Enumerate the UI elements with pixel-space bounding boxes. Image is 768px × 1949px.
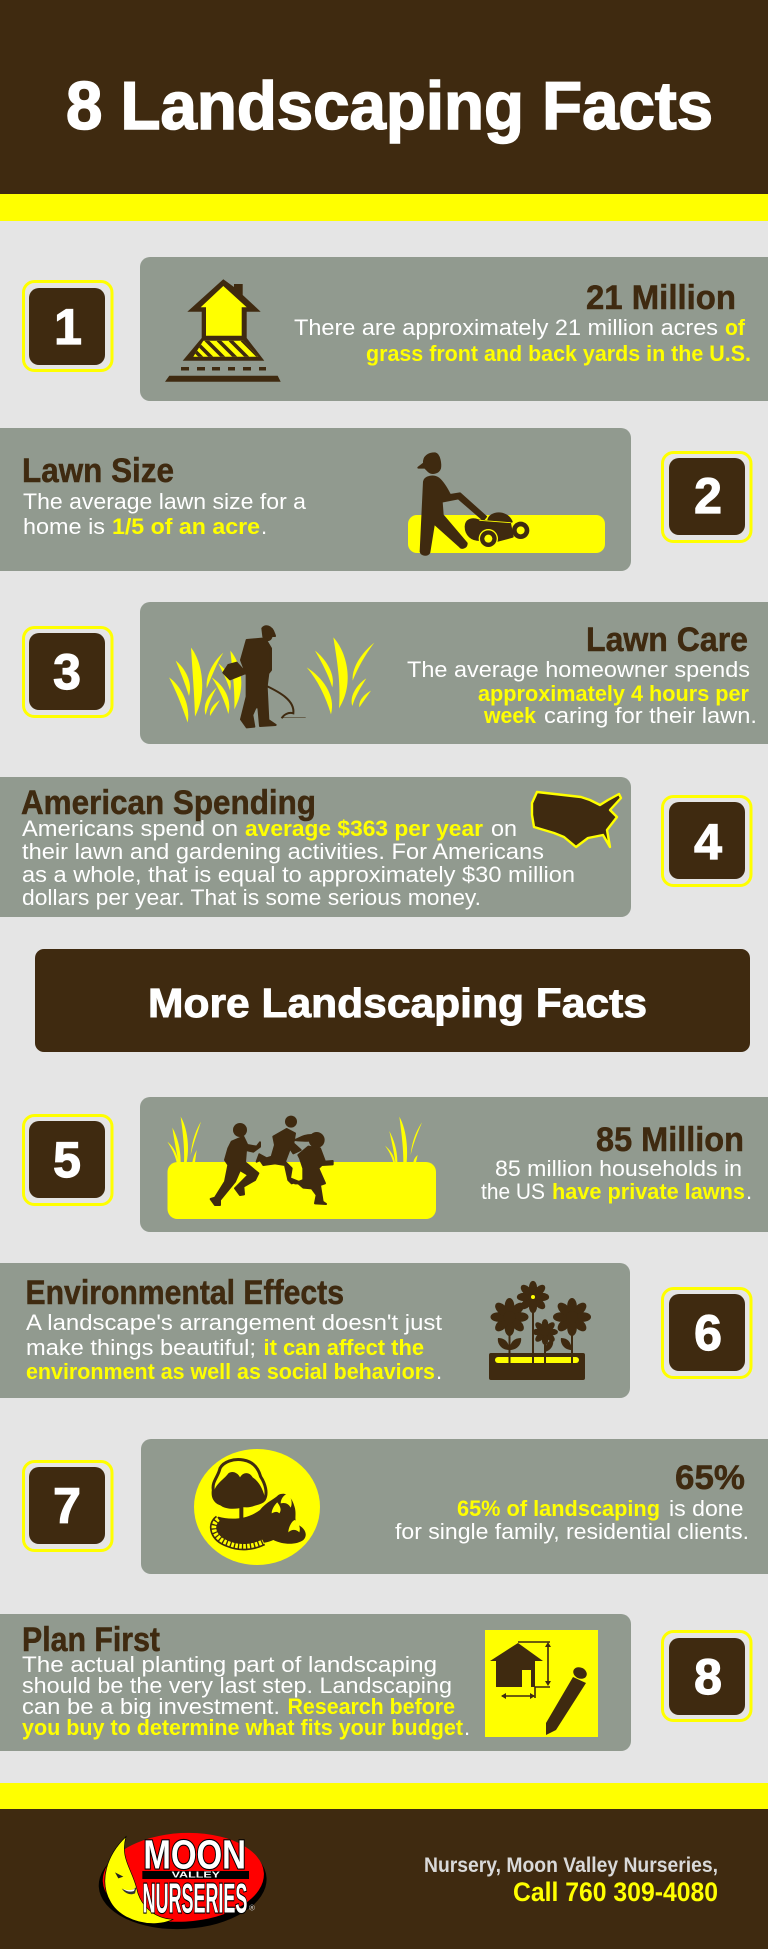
badge 7: 7 [53,1478,81,1534]
heading: 85 Million: 85 Million [596,1121,744,1159]
text: average lawn size: The average lawn size for a [23,489,307,514]
text: planting and budget: The actual planting part of landscaping [22,1652,437,1677]
text: planting and budget: . [464,1715,470,1740]
text: 4 hours per week: The average homeowner spends [407,657,750,682]
text: spending figures: as a whole, that is equal to approximately $30 million [22,862,575,887]
heading: Plan First: Plan First [22,1621,160,1659]
text: households with lawns: the US [481,1179,545,1204]
logo: Moon Valley Nurseries: VALLEY [172,1870,220,1880]
icon: tree and shrubs in yellow circle [194,1449,320,1565]
text: residential clients: 65% of landscaping [457,1496,660,1521]
panel: fact 2, lawn size [0,428,631,571]
badge 8 [662,1632,751,1720]
badge 1: 1 [54,299,82,355]
text: planting and budget: you buy to determine what fits your budget [22,1715,463,1740]
text: acres of grass: There are approximately 21 million acres [294,315,718,340]
logo: Moon Valley Nurseries [96,1829,269,1933]
badge 3: 3 [53,644,81,700]
title: 8 Landscaping Facts [66,68,713,144]
panel: fact 1, 21 million [140,257,768,401]
badge 7 [24,1462,112,1550]
text: 4 hours per week: week [483,703,536,728]
header band [0,0,768,221]
text: households with lawns [481,1156,752,1204]
text: planting and budget: Research before [288,1694,455,1719]
text: residential clients: is done [669,1496,744,1521]
icon: house plan and pencil [485,1630,598,1737]
panel: fact 4, American spending [0,777,631,917]
text: landscape arrangement: . [436,1359,442,1384]
text: acres of grass: of [725,315,745,340]
badge 4 [662,796,751,886]
text: households with lawns: 85 million households in [495,1156,742,1181]
text: spending figures: dollars per year. That is some serious money. [22,885,481,910]
text: households with lawns: . [746,1179,752,1204]
text: landscape arrangement: make things beautiful; [26,1335,256,1360]
heading: Lawn Size: Lawn Size [22,452,174,490]
icon: person mowing lawn [408,453,605,555]
panel: fact 5, 85 million [140,1097,768,1232]
text: landscape arrangement: environment as well as social behaviors [26,1359,435,1384]
panel: fact 7, 65 percent [141,1439,768,1574]
badge 5: 5 [53,1132,81,1188]
icon: man trimming grass [169,626,374,727]
text: planting and budget: should be the very last step. Landscaping [22,1673,452,1698]
text: spending figures: Americans spend on [22,816,238,841]
text: planting and budget [22,1652,470,1740]
badge 2 [662,452,751,542]
text: residential clients [395,1496,749,1544]
text: 4 hours per week: caring for their lawn. [544,703,757,728]
text: acres of grass [294,315,751,366]
text: spending figures [22,816,575,910]
icon: children running on lawn [167,1116,436,1219]
badge 1 [24,282,112,370]
footer band [0,1783,768,1949]
text: landscape arrangement: it can affect the [264,1335,424,1360]
text: average lawn size: home is [23,514,105,539]
logo: Moon Valley Nurseries: MOON [143,1831,246,1877]
badge 8: 8 [694,1649,722,1705]
icon: map of the USA [532,792,621,847]
text: landscape arrangement: A landscape's arrangement doesn't just [26,1310,442,1335]
text: residential clients: for single family, residential clients. [395,1519,749,1544]
badge 3 [24,628,112,716]
heading: Environmental Effects: Environmental Effects [26,1274,344,1312]
logo: Moon Valley Nurseries: ® [249,1903,255,1912]
badge 2: 2 [694,468,722,524]
text: average lawn size: . [261,514,267,539]
icon: house on lawn [165,279,281,382]
banner: more landscaping facts [35,949,750,1052]
icon: flowers in planter [489,1281,591,1380]
panel: fact 3, lawn care [140,602,768,744]
text: spending figures: average $363 per year [245,816,483,841]
text: planting and budget: can be a big investment. [22,1694,280,1719]
panel: fact 6, environmental effects [0,1263,630,1398]
text: spending figures: their lawn and gardening activities. For Americans [22,839,544,864]
heading: Lawn Care: Lawn Care [586,621,748,659]
text: landscape arrangement [26,1310,442,1384]
text: average lawn size: 1/5 of an acre [112,514,260,539]
text: spending figures: on [491,816,517,841]
panel: fact 8, plan first [0,1614,631,1751]
text: average lawn size [23,489,307,539]
text: 4 hours per week [407,657,757,728]
banner: more landscaping facts: More Landscaping Facts [148,980,647,1026]
heading: 21 Million: 21 Million [586,279,736,317]
badge 5 [24,1116,112,1204]
text: phone number: Call 760 309-4080 [513,1877,718,1907]
heading: 65%: 65% [675,1459,745,1497]
text: households with lawns: have private lawns [552,1179,745,1204]
text: acres of grass: grass front and back yards in the U.S. [366,341,751,366]
heading: American Spending: American Spending [21,784,316,822]
text: nursery name: Nursery, Moon Valley Nurseries, [424,1854,718,1877]
badge 6 [662,1288,751,1378]
text: 4 hours per week: approximately 4 hours per [478,681,749,706]
logo: Moon Valley Nurseries: NURSERIES [143,1875,247,1921]
badge 4: 4 [694,814,722,870]
badge 6: 6 [694,1305,722,1361]
